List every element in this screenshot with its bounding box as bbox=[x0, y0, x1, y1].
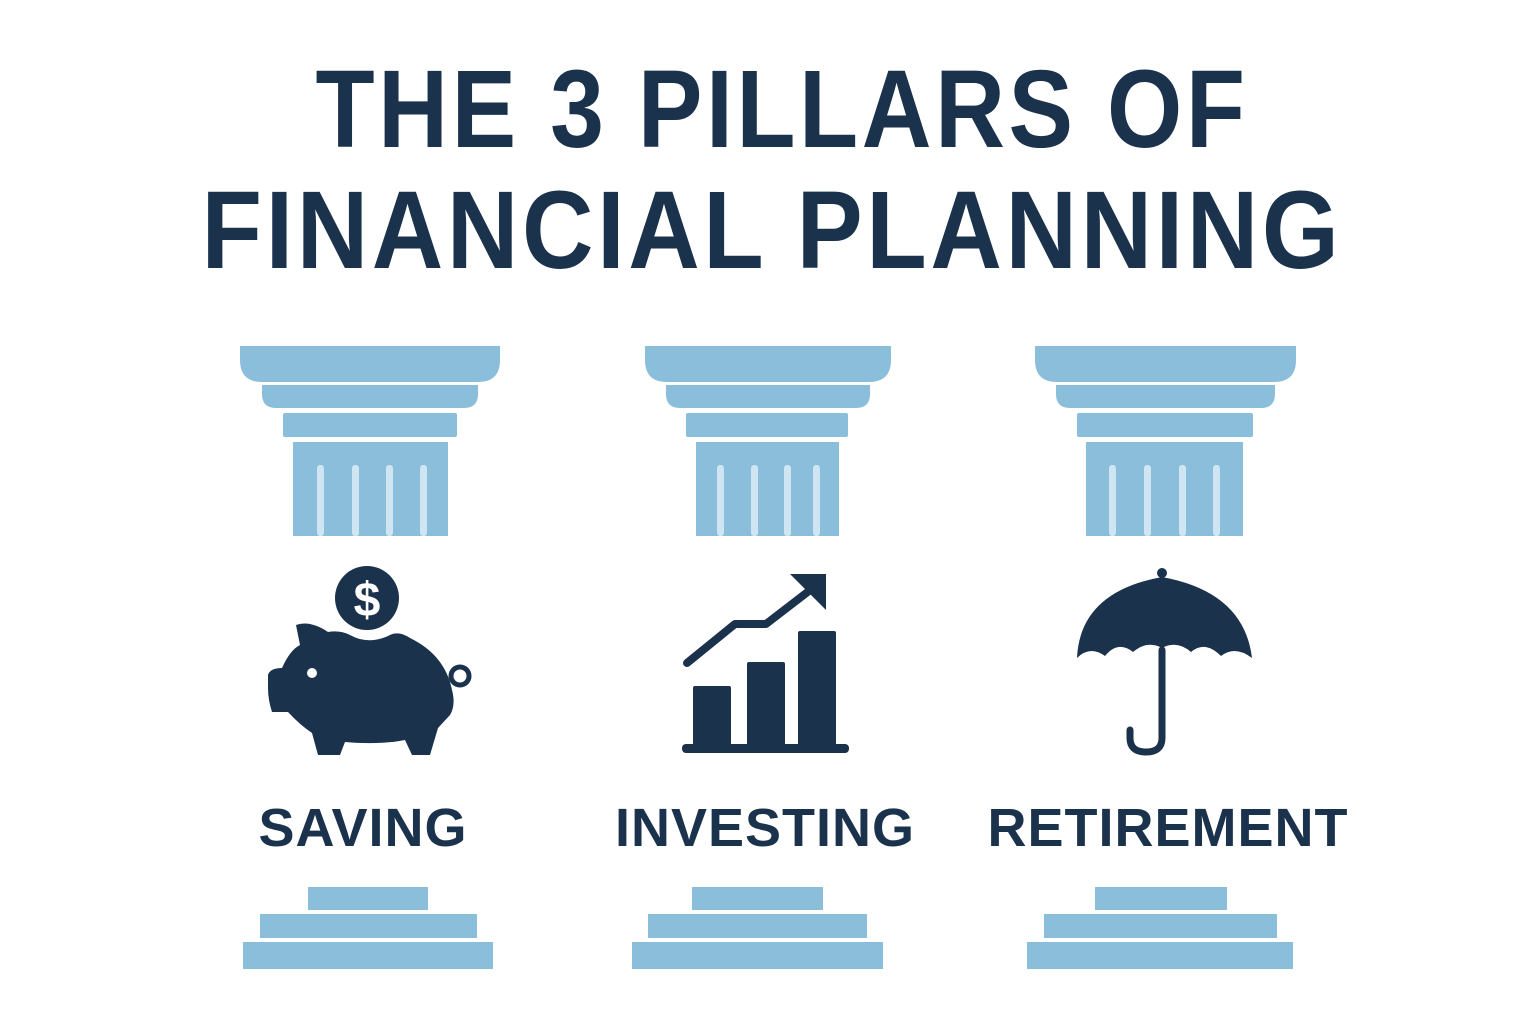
icon: umbrella bbox=[1077, 568, 1252, 752]
title: THE 3 PILLARS OF bbox=[316, 48, 1248, 171]
title bbox=[202, 48, 1342, 292]
pillar 1 base bbox=[243, 887, 493, 969]
pillar 2 base bbox=[632, 887, 883, 969]
title: FINANCIAL PLANNING bbox=[202, 169, 1342, 292]
icon: piggy bank bbox=[268, 566, 469, 755]
pillar 2 capital bbox=[645, 346, 891, 536]
icon: piggy bank: $ bbox=[354, 574, 381, 627]
pillar 3 capital bbox=[1035, 346, 1296, 536]
label: investing: INVESTING bbox=[615, 798, 915, 858]
pillar 3 base bbox=[1027, 887, 1293, 969]
label: saving: SAVING bbox=[258, 798, 468, 858]
icon: growth chart bbox=[682, 574, 849, 753]
pillar 1 capital bbox=[240, 346, 500, 536]
label: retirement: RETIREMENT bbox=[988, 798, 1348, 858]
